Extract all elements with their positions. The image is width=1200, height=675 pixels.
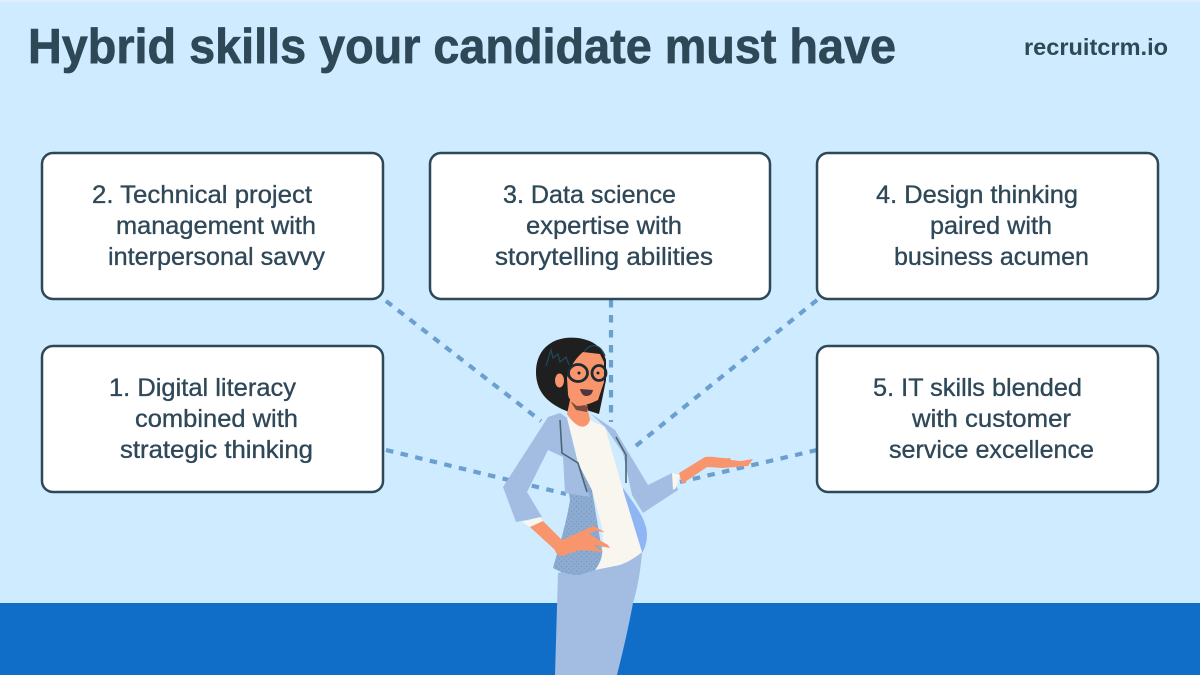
- panel: skill 2: management with: [116, 212, 316, 240]
- right cuff: [672, 473, 680, 490]
- panel: skill 1: 1. Digital literacy: [109, 374, 297, 402]
- left forearm and hand on hip: [530, 521, 610, 556]
- skirt: [555, 553, 642, 675]
- panel: skill 1: strategic thinking: [120, 436, 313, 464]
- panel: skill 5: [817, 346, 1158, 492]
- right arm of jacket: [590, 413, 678, 513]
- panel: skill 4: 4. Design thinking: [876, 181, 1078, 209]
- panel: skill 3: 3. Data science: [503, 181, 676, 209]
- left cuff: [522, 517, 543, 527]
- glasses: [568, 364, 606, 382]
- dashed connectors: [386, 300, 817, 494]
- panel: skill 3: expertise with: [526, 212, 682, 240]
- panel: skill 5: service excellence: [889, 436, 1094, 464]
- hair highlight: [546, 346, 605, 366]
- panel: skill 5: with customer: [911, 405, 1071, 433]
- left arm and left lapel: [503, 413, 590, 522]
- title: Hybrid skills your candidate must have: [28, 20, 896, 74]
- lapel left shading: [560, 420, 587, 492]
- blue jacket lining: [623, 488, 647, 553]
- ear: [555, 374, 564, 388]
- lapel right shading: [616, 437, 626, 483]
- shirt: [567, 418, 642, 570]
- right forearm and open hand: [679, 457, 753, 484]
- panel: skill 3: storytelling abilities: [495, 243, 713, 271]
- panel: skill 2: [42, 153, 383, 299]
- eyes: [578, 372, 600, 374]
- panel: skill 2: 2. Technical project: [92, 181, 312, 209]
- mouth: [580, 389, 593, 396]
- illustration: woman presenting: [503, 338, 753, 675]
- floor band: [0, 603, 1200, 675]
- hair back: [536, 338, 606, 414]
- panel: skill 2: interpersonal savvy: [108, 243, 325, 271]
- panel: skill 1: [42, 346, 383, 492]
- face: [567, 352, 604, 406]
- panel: skill 4: [817, 153, 1158, 299]
- lower jacket: [553, 457, 603, 575]
- neck: [567, 400, 590, 427]
- neck shadow: [571, 402, 588, 412]
- panel: skill 1: combined with: [135, 405, 298, 433]
- panel: skill 5: 5. IT skills blended: [873, 374, 1082, 402]
- logo text: recruitcrm.io: [1024, 34, 1168, 60]
- panel: skill 4: business acumen: [894, 243, 1089, 271]
- panel: skill 4: paired with: [930, 212, 1052, 240]
- panel: skill 3: [430, 153, 770, 299]
